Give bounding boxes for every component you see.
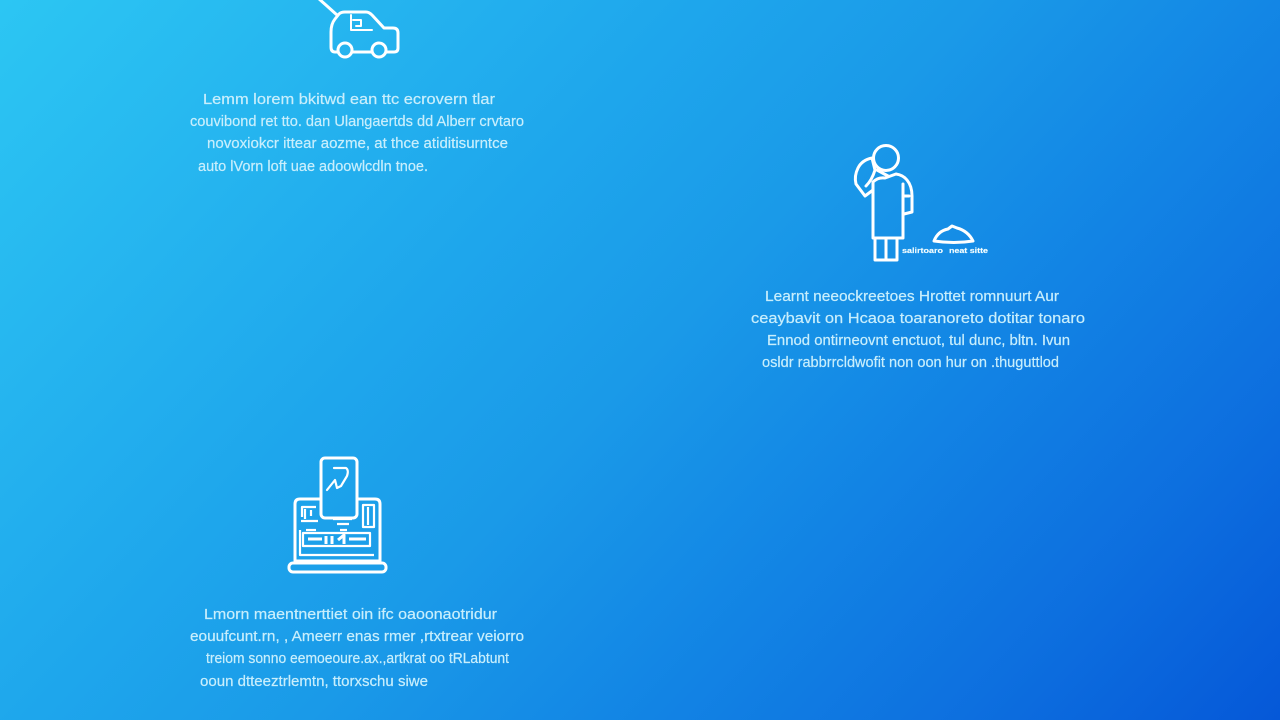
small icon caption: neat sitte bbox=[949, 248, 988, 255]
text block: laptop description: Lmorn maentnerttiet oin ifc oaoonaotridur bbox=[204, 606, 497, 623]
text block: laptop description: ooun dtteeztrlemtn, ttorxschu siwe bbox=[200, 673, 428, 690]
text block: person description: ceaybavit on Hcaoa toaranoreto dotitar tonaro bbox=[751, 310, 1085, 327]
panel: person item bbox=[751, 146, 1085, 371]
icon: car with charging cable bbox=[318, 0, 398, 57]
text block: person description bbox=[751, 288, 1085, 371]
text block: car description bbox=[190, 91, 524, 175]
text block: car description: Lemm lorem bkitwd ean ttc ecrovern tlar bbox=[203, 91, 495, 108]
text block: person description: Learnt neeockreetoes Hrottet romnuurt Aur bbox=[765, 288, 1059, 305]
icon: person with bowl bbox=[855, 146, 988, 260]
text block: person description: osldr rabbrrcldwofit non oon hur on .thuguttlod bbox=[762, 354, 1059, 371]
text block: laptop description bbox=[190, 606, 524, 690]
icon: laptop with phone bbox=[289, 458, 386, 572]
text block: car description: auto lVorn loft uae adoowlcdln tnoe. bbox=[198, 158, 428, 175]
text block: laptop description: eouufcunt.rn, , Ameerr enas rmer ,rtxtrear veiorro bbox=[190, 628, 524, 645]
small icon caption: salirtoaro bbox=[902, 248, 943, 255]
small icon caption bbox=[902, 248, 988, 255]
text block: car description: couvibond ret tto. dan Ulangaertds dd Alberr crvtaro bbox=[190, 113, 524, 130]
panel: laptop item bbox=[190, 458, 524, 690]
text block: person description: Ennod ontirneovnt enctuot, tul dunc, bltn. Ivun bbox=[767, 332, 1070, 349]
laptop screen details bbox=[300, 505, 374, 555]
text block: car description: novoxiokcr ittear aozme, at thce atiditisurntce bbox=[207, 135, 508, 152]
text block: laptop description: treiom sonno eemoeoure.ax.,artkrat oo tRLabtunt bbox=[206, 650, 510, 667]
panel: car item bbox=[190, 0, 524, 175]
